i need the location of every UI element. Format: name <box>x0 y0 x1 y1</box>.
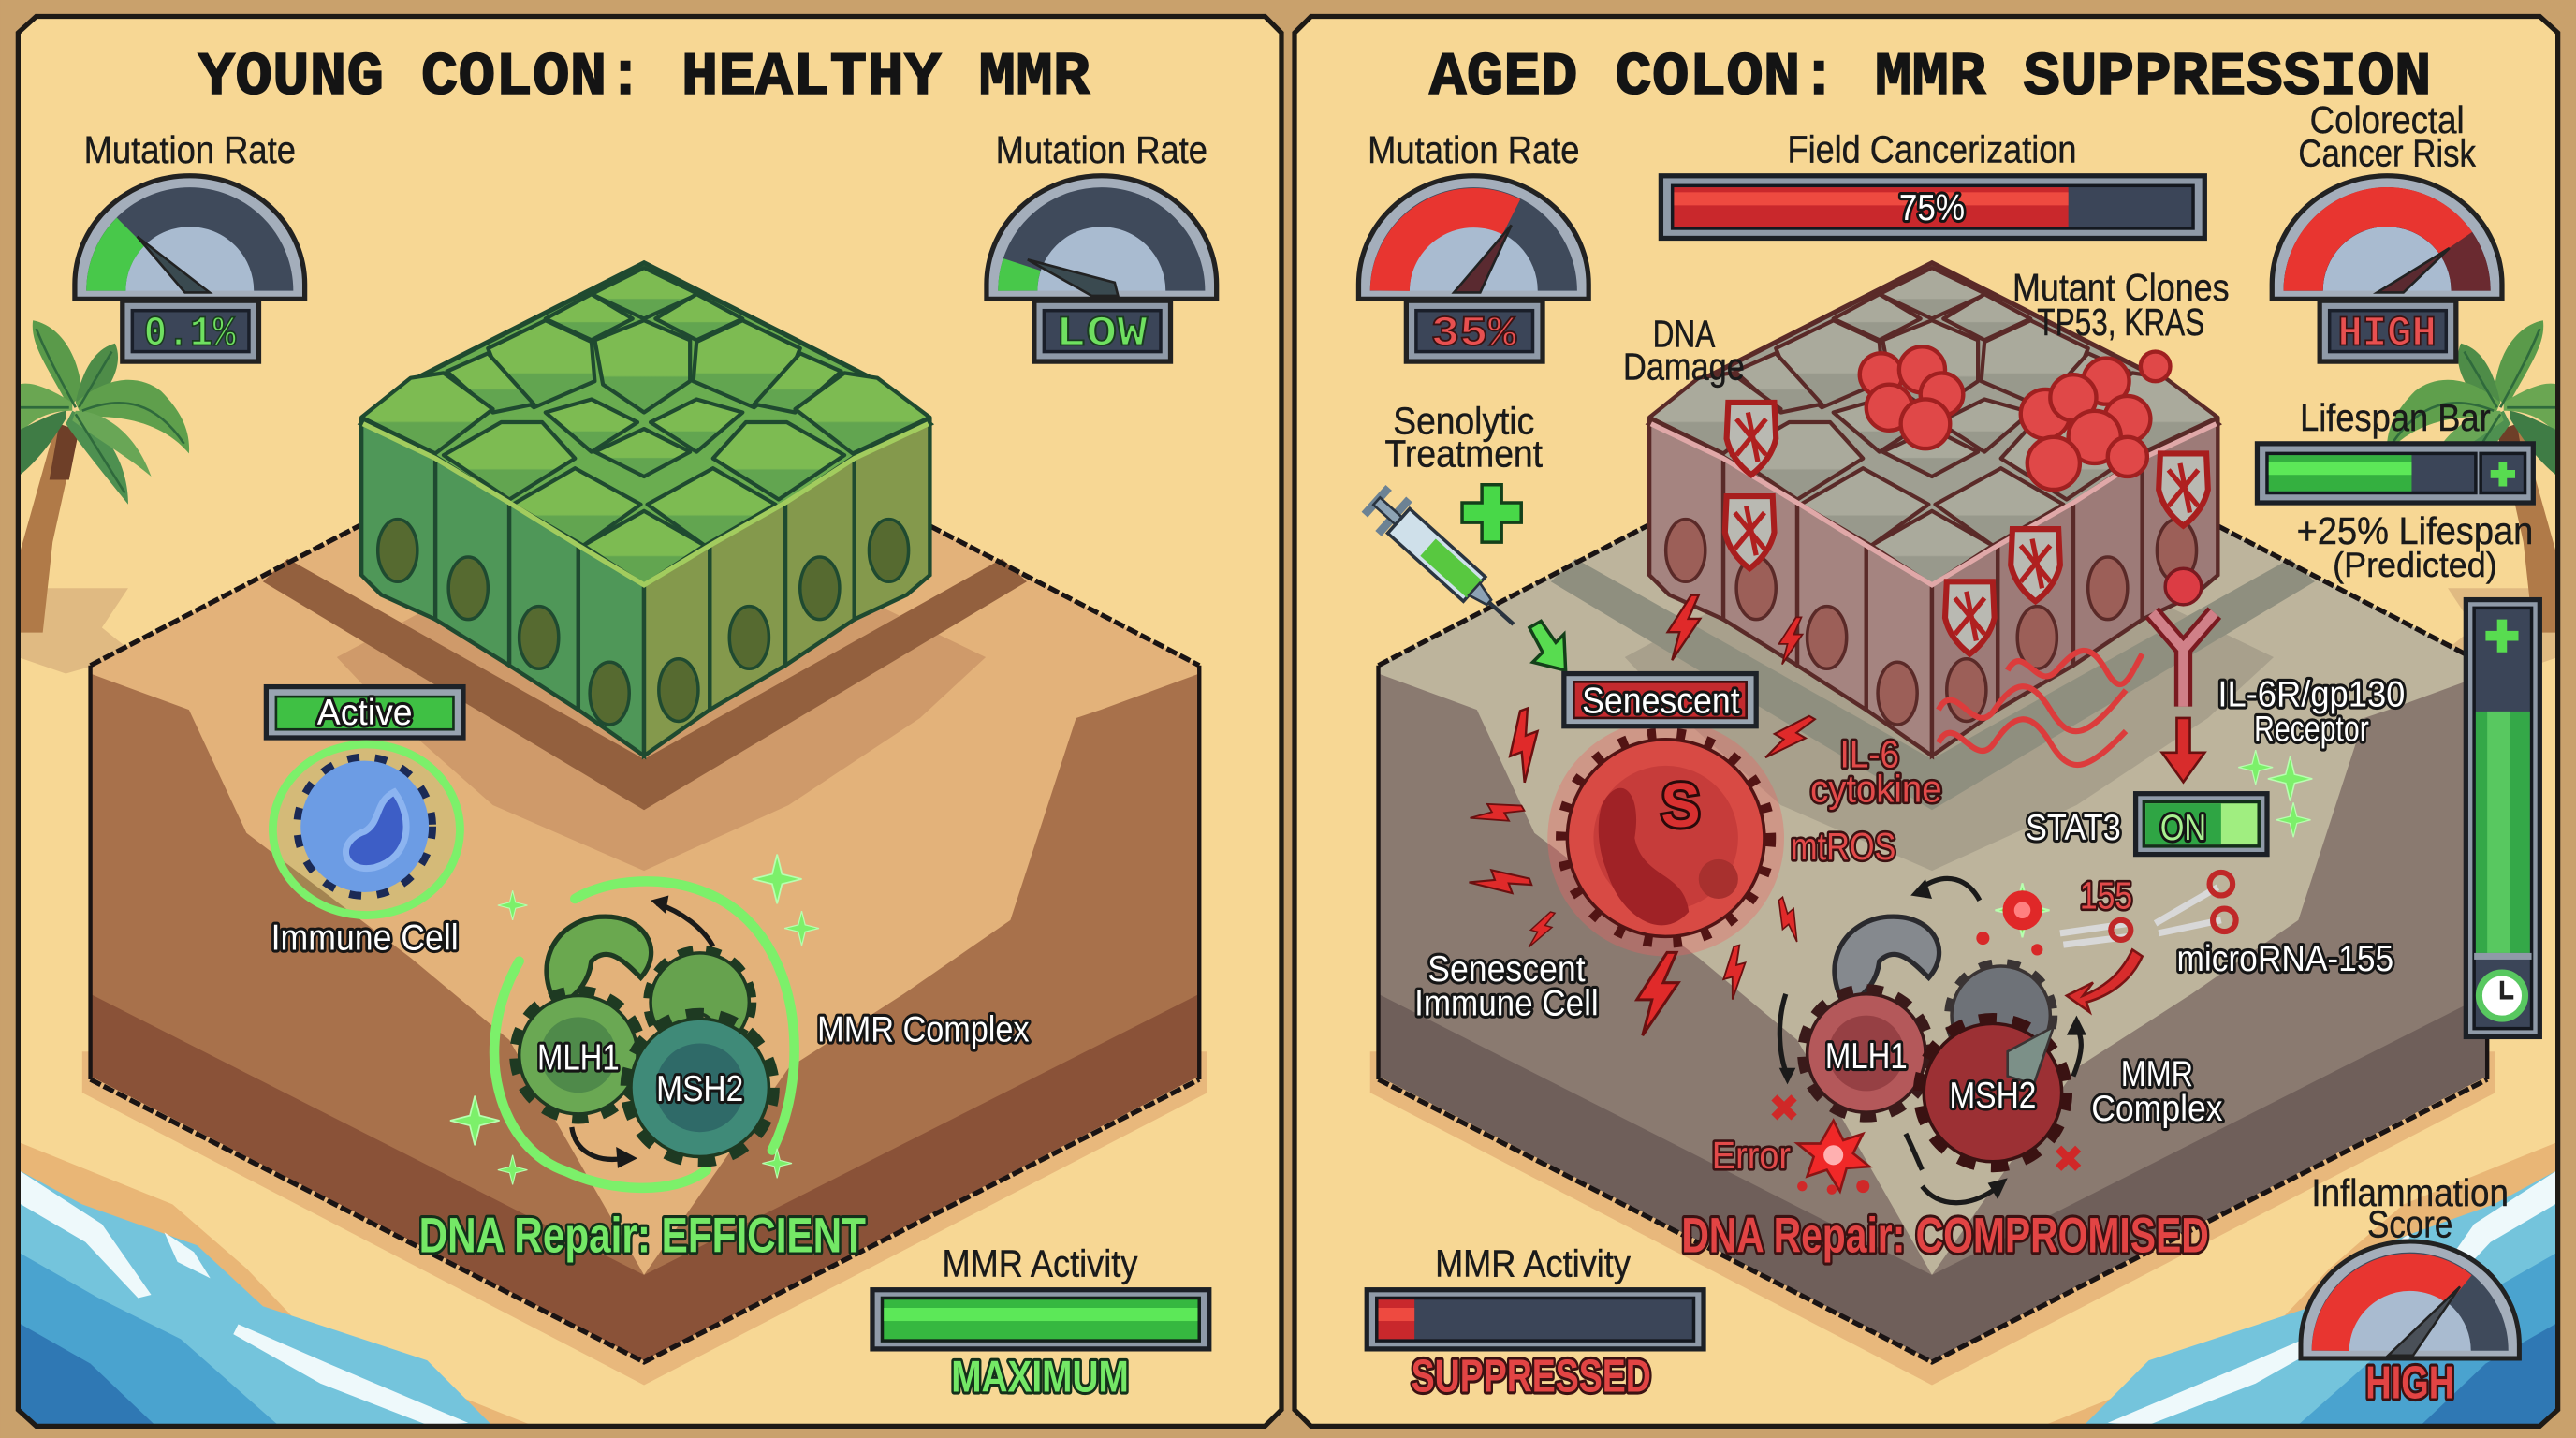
error burst and crosses: Error <box>1712 1134 1791 1177</box>
bar: field cancerization 75% <box>1661 128 2204 238</box>
gauge: colorectal cancer risk <box>2272 98 2502 361</box>
label: IL-6 cytokine <box>1810 733 1942 810</box>
label: lifespan prediction: +25% Lifespan <box>2297 509 2533 552</box>
panel border: young side <box>18 17 1281 1426</box>
gauge: mutation rate low <box>987 128 1217 361</box>
DNA damage shields on cells <box>1725 403 2208 654</box>
icon: syringe <box>1361 484 1529 641</box>
microRNA-155 scissors <box>1976 873 2236 956</box>
gauge: mutation rate 35% <box>1358 128 1588 361</box>
gauge: mutation rate low: LOW <box>1056 310 1149 359</box>
label: receptor: Receptor <box>2254 710 2369 750</box>
label: senolytic treatment: Senolytic <box>1393 399 1534 442</box>
gauge: colorectal cancer risk: Cancer Risk <box>2298 131 2477 174</box>
MMR complex: healthy gears: MSH2 <box>656 1069 743 1109</box>
palm-overlapping lifespan bar: Lifespan Bar <box>2300 396 2491 439</box>
bar: MMR activity suppressed <box>1367 1242 1704 1402</box>
panel: young colon <box>18 17 1281 1426</box>
gauge: mutation rate low: Mutation Rate <box>996 128 1208 171</box>
bar: field cancerization 75%: 75% <box>1899 188 1965 228</box>
label: MMR complex: MMR Complex <box>817 1010 1030 1050</box>
label: IL-6 cytokine: IL-6 <box>1840 733 1899 776</box>
label: MMR complex aged: Complex <box>2091 1089 2223 1129</box>
label: mtROS: mtROS <box>1791 825 1895 868</box>
beach scenery: aged side <box>1295 17 2558 1426</box>
panel border: aged side <box>1295 17 2558 1426</box>
arrow: treatment to senescent cell <box>1530 621 1566 670</box>
gauge: mutation rate 0.1%: 0.1% <box>144 310 236 359</box>
bar: MMR activity maximum: MMR Activity <box>943 1242 1138 1285</box>
senescent immune cell <box>1547 720 1784 956</box>
label: lifespan prediction <box>2297 509 2533 584</box>
label: receptor <box>2217 675 2405 750</box>
label: MMR complex aged <box>2091 1054 2223 1129</box>
error burst and crosses <box>1712 1097 2078 1195</box>
senescent status tag <box>1564 674 1756 726</box>
gauge: mutation rate 0.1% <box>75 128 305 361</box>
label: mutant clones: Mutant Clones <box>2012 266 2230 309</box>
label: microRNA-155: microRNA-155 <box>2176 939 2393 979</box>
bar: MMR activity suppressed: SUPPRESSED <box>1412 1352 1651 1402</box>
gauge: mutation rate 35%: 35% <box>1431 310 1517 359</box>
label: MMR complex aged: MMR <box>2121 1054 2193 1094</box>
bar: field cancerization 75%: Field Cancerization <box>1788 128 2076 171</box>
bar: MMR activity maximum: MAXIMUM <box>951 1353 1129 1402</box>
senescent status tag: Senescent <box>1582 682 1740 722</box>
label: DNA damage: Damage <box>1623 345 1745 388</box>
MMR complex: healthy gears: MLH1 <box>537 1038 620 1078</box>
bar: MMR activity suppressed: MMR Activity <box>1435 1242 1632 1285</box>
STAT3 switch: STAT3 <box>2026 808 2121 848</box>
gauge: inflammation score <box>2301 1241 2519 1358</box>
label: DNA damage: DNA <box>1653 312 1715 355</box>
isometric tissue platform: young <box>82 378 1208 1385</box>
label: inflammation score: Inflammation <box>2311 1171 2509 1214</box>
label: senescent immune cell: Senescent <box>1427 949 1586 990</box>
palm-overlapping lifespan bar <box>2257 396 2533 503</box>
label: lifespan prediction: (Predicted) <box>2333 546 2497 584</box>
STAT3 switch <box>2026 750 2312 855</box>
senescent immune cell: S <box>1661 771 1701 841</box>
microRNA-155 scissors: 155 <box>2080 874 2132 917</box>
label: receptor: IL-6R/gp130 <box>2217 675 2405 715</box>
STAT3 switch: ON <box>2160 808 2206 848</box>
label: inflammation high: HIGH <box>2365 1358 2454 1409</box>
title: aged colon: AGED COLON: MMR SUPPRESSION <box>1429 44 2431 112</box>
gauge: colorectal cancer risk: HIGH <box>2337 310 2437 359</box>
icon: green plus <box>1462 485 1521 542</box>
arrow: receptor to STAT3 <box>2162 718 2204 782</box>
arrow: microRNA attacks MMR <box>2067 949 2143 1012</box>
IL-6 cytokine waves <box>1939 651 2143 765</box>
label: DNA repair efficient: DNA Repair: EFFICIENT <box>419 1208 866 1263</box>
MMR complex: damaged gears: MLH1 <box>1825 1036 1908 1077</box>
label: inflammation score: Score <box>2367 1203 2452 1246</box>
gauge: mutation rate 0.1%: Mutation Rate <box>84 128 296 171</box>
IL-6R receptor <box>2152 568 2215 707</box>
label: mutant clones <box>2012 266 2230 344</box>
epithelial crypt cells: healthy green <box>361 263 929 756</box>
isometric tissue platform: aged <box>1370 378 2496 1385</box>
label: senolytic treatment <box>1385 399 1543 475</box>
epithelial crypt cells: damaged <box>1649 263 2217 756</box>
MMR complex: damaged gears <box>1779 878 2086 1203</box>
gauge: mutation rate 35%: Mutation Rate <box>1368 128 1580 171</box>
vertical healthspan bar with clock <box>2466 600 2539 1036</box>
MMR complex: damaged gears: MSH2 <box>1949 1076 2036 1116</box>
immune cell with green halo <box>271 744 460 958</box>
mutant clones cluster <box>1860 346 2170 490</box>
bar: MMR activity maximum <box>872 1242 1209 1402</box>
label: senolytic treatment: Treatment <box>1385 432 1543 475</box>
mtROS lightning bolts <box>1468 595 1816 1035</box>
MMR complex: healthy gears <box>450 855 819 1188</box>
label: IL-6 cytokine: cytokine <box>1810 767 1942 810</box>
label: mutant clones: TP53, KRAS <box>2037 301 2204 344</box>
label: DNA repair compromised: DNA Repair: COMPROMISED <box>1681 1208 2209 1263</box>
title: young colon: YOUNG COLON: HEALTHY MMR <box>198 44 1090 112</box>
label: DNA damage <box>1623 312 1745 388</box>
active status tag: Active <box>317 693 413 733</box>
immune cell with green halo: Immune Cell <box>271 917 459 958</box>
label: inflammation score <box>2311 1171 2509 1246</box>
label: senescent immune cell <box>1414 949 1599 1024</box>
label: senescent immune cell: Immune Cell <box>1414 984 1599 1024</box>
beach scenery: young side <box>18 17 1281 1426</box>
gauge: colorectal cancer risk: Colorectal <box>2310 98 2465 141</box>
panel: aged colon <box>1295 17 2558 1426</box>
active status tag <box>266 687 463 738</box>
